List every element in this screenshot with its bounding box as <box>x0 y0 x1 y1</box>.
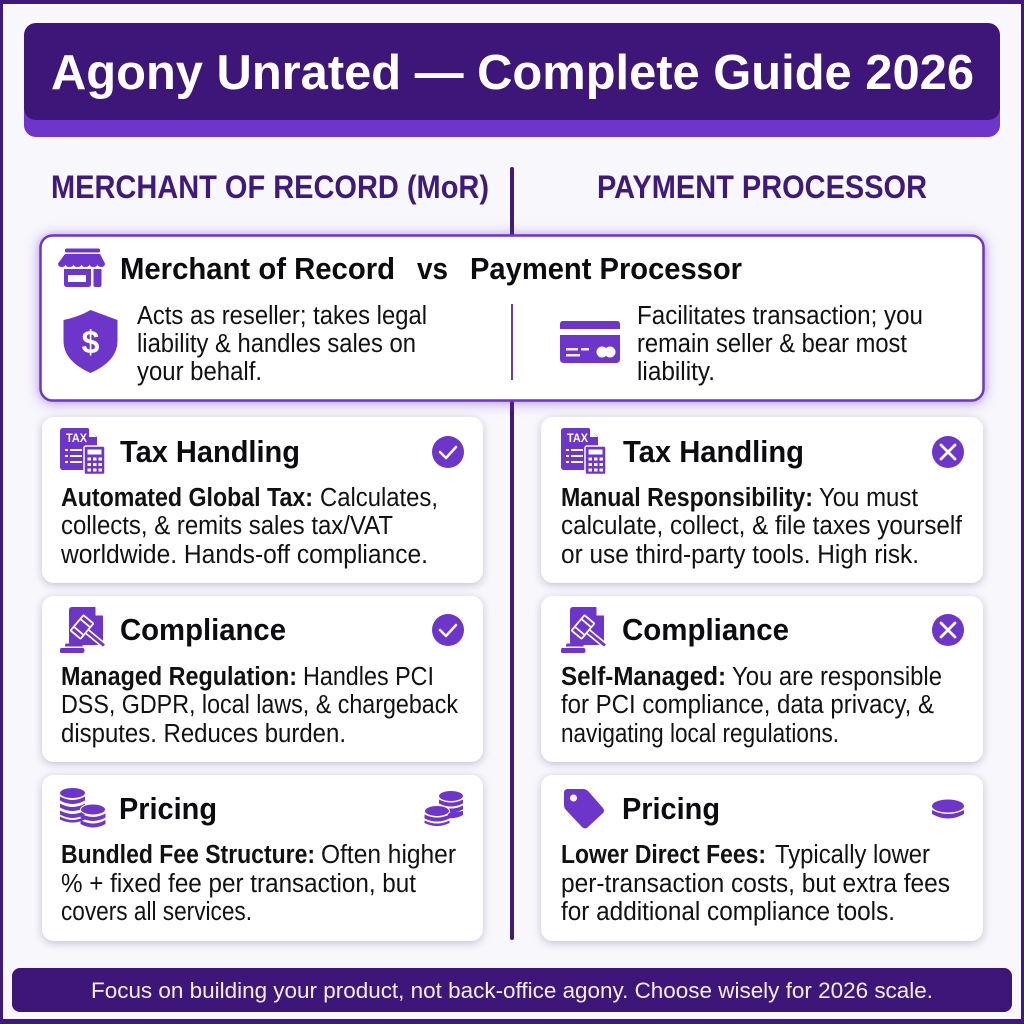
body text: for PCI compliance, data privacy, & <box>561 691 934 719</box>
panel: processor tax handling <box>541 417 983 583</box>
panel: MoR compliance <box>42 596 483 762</box>
summary heading: Merchant of Record <box>120 251 395 286</box>
body text <box>561 484 963 569</box>
body text: % + fixed fee per transaction, but <box>61 870 416 898</box>
title banner: Agony Unrated — Complete Guide 2026 <box>51 46 974 100</box>
body text: Manual Responsibility: <box>561 484 813 512</box>
icon: shield with dollar: $ <box>82 324 100 360</box>
center divider <box>510 167 514 940</box>
body text <box>561 663 942 748</box>
icon: gavel document <box>561 607 605 653</box>
body text: You are responsible <box>732 663 942 691</box>
body text: Automated Global Tax: <box>61 484 313 512</box>
footer banner: Focus on building your product, not back-office agony. Choose wisely for 2026 scale. <box>91 978 933 1003</box>
panel: MoR pricing <box>42 775 483 941</box>
icon: tax calculator <box>561 428 606 474</box>
body text: Calculates, <box>320 484 438 512</box>
merchant of record description: your behalf. <box>137 358 262 386</box>
heading: Tax Handling <box>120 434 300 469</box>
body text: Lower Direct Fees: <box>561 841 766 869</box>
summary heading <box>120 251 742 286</box>
icon: price tag <box>564 789 604 828</box>
column heading: payment processor: PAYMENT PROCESSOR <box>597 169 927 205</box>
body text: collects, & remits sales tax/VAT <box>61 512 393 540</box>
merchant of record description: liability & handles sales on <box>137 330 416 358</box>
body text <box>61 841 456 926</box>
icon: tax calculator: TAX <box>567 431 588 445</box>
body text: disputes. Reduces burden. <box>61 720 346 748</box>
heading: Tax Handling <box>623 434 804 469</box>
body text: navigating local regulations. <box>561 720 839 748</box>
panel: processor compliance <box>541 596 983 762</box>
body text <box>60 484 438 569</box>
body text: Managed Regulation: <box>61 663 297 691</box>
merchant of record description: Acts as reseller; takes legal <box>137 302 427 330</box>
icon: single coin <box>932 800 964 818</box>
body text: Handles PCI <box>303 663 434 691</box>
icon: tax calculator <box>60 428 105 474</box>
body text: per-transaction costs, but extra fees <box>561 870 950 898</box>
body text: You must <box>819 484 918 512</box>
heading: Compliance <box>622 612 789 647</box>
body text: Often higher <box>321 841 456 869</box>
body text: covers all services. <box>61 898 252 926</box>
merchant of record description <box>137 302 427 386</box>
icon: credit card <box>560 321 620 363</box>
panel: MoR tax handling <box>42 417 483 583</box>
heading: Pricing <box>622 791 720 826</box>
payment processor description <box>637 302 923 386</box>
heading: Compliance <box>120 612 286 647</box>
icon: coins small <box>424 791 463 826</box>
body text: calculate, collect, & file taxes yourself <box>561 512 963 540</box>
footer banner <box>12 968 1012 1012</box>
body text: Typically lower <box>775 841 930 869</box>
icon: gavel document <box>60 607 104 653</box>
body text <box>561 841 950 926</box>
body text: DSS, GDPR, local laws, & chargeback <box>61 691 458 719</box>
summary heading: Payment Processor <box>470 251 742 286</box>
payment processor description: remain seller & bear most <box>637 330 907 358</box>
payment processor description: liability. <box>637 358 715 386</box>
summary heading: vs <box>417 251 448 286</box>
icon: coin stacks <box>60 788 106 828</box>
panel: comparison summary <box>40 236 984 400</box>
column heading: merchant of record: MERCHANT OF RECORD (MoR) <box>51 169 489 205</box>
payment processor description: Facilitates transaction; you <box>637 302 923 330</box>
title banner <box>24 23 1000 137</box>
icon: check badge <box>432 614 464 646</box>
body text: or use third-party tools. High risk. <box>561 541 919 569</box>
body text <box>61 663 458 748</box>
icon: cross badge <box>932 436 964 468</box>
icon: tax calculator: TAX <box>66 431 87 445</box>
body text: for additional compliance tools. <box>561 898 895 926</box>
body text: Bundled Fee Structure: <box>61 841 315 869</box>
icon: check badge <box>432 436 464 468</box>
heading: Pricing <box>119 791 217 826</box>
body text: Self-Managed: <box>561 663 726 691</box>
body text: worldwide. Hands-off compliance. <box>60 541 428 569</box>
icon: storefront <box>58 248 105 287</box>
panel: processor pricing <box>541 775 983 941</box>
icon: shield with dollar <box>64 310 118 373</box>
icon: cross badge <box>932 614 964 646</box>
